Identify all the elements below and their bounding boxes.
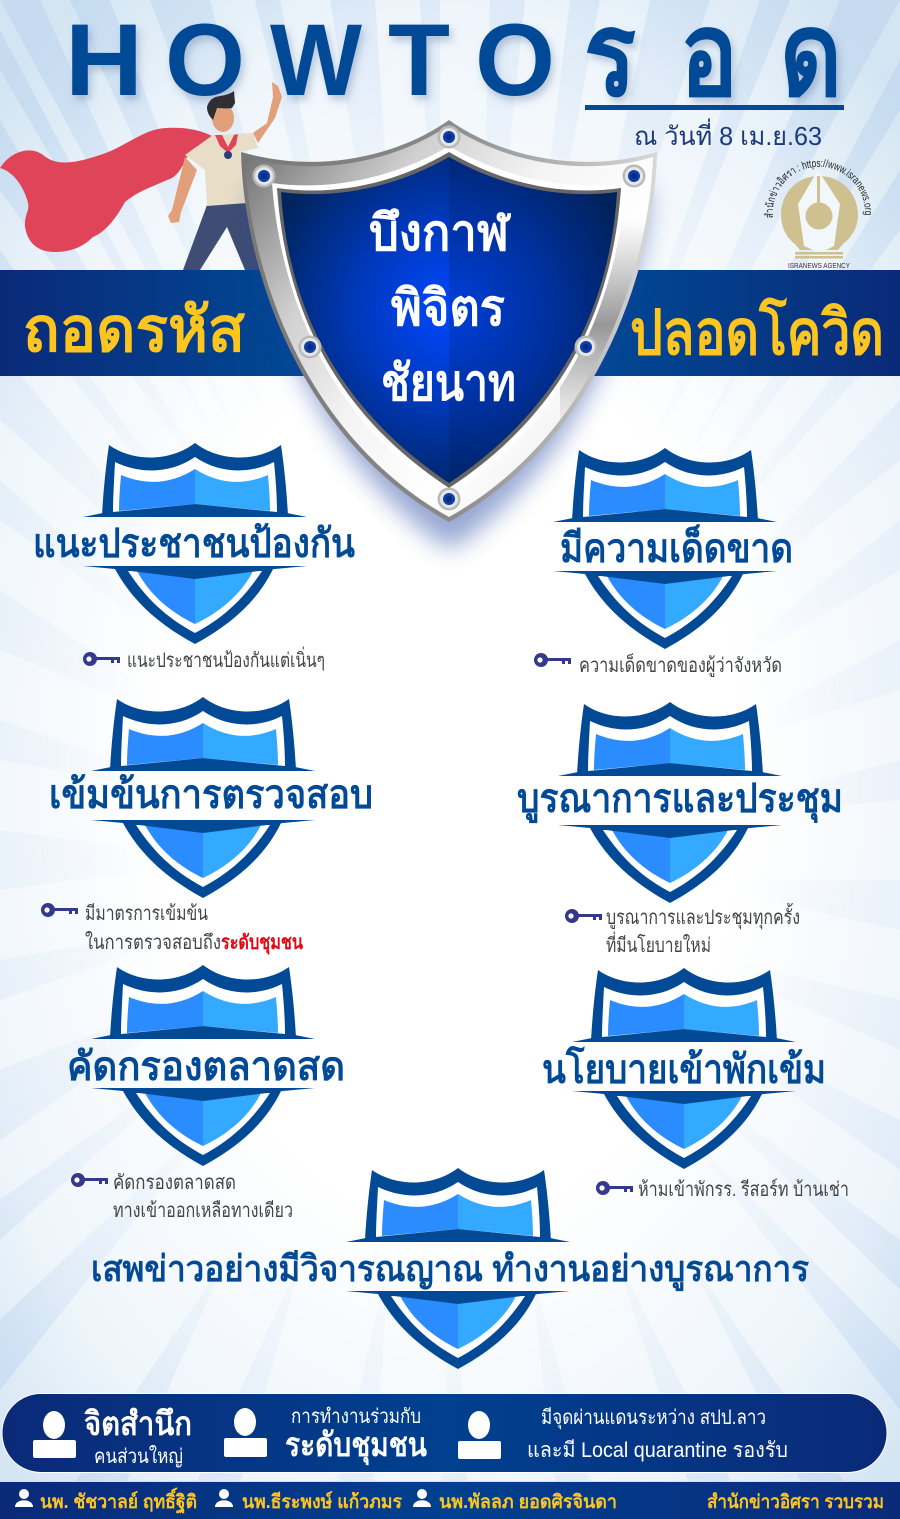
- key note 5: ทางเข้าออกเหลือทางเดียว: [113, 1200, 293, 1222]
- text: จุดผ่านแดน: และมี Local quarantine รองรับ: [527, 1439, 788, 1462]
- badge: บูรณาการและประชุม: [517, 702, 843, 903]
- banner right: [580, 270, 900, 376]
- key note 6: [596, 1178, 849, 1201]
- credit 1: [15, 1487, 197, 1515]
- hero with red cape: [0, 82, 282, 270]
- key note 6: ห้ามเข้าพักรร. รีสอร์ท บ้านเช่า: [638, 1178, 849, 1201]
- date: ณ วันที่ 8 เม.ย.63: [634, 118, 822, 151]
- badge: บูรณาการและประชุม: บูรณาการและประชุม: [517, 777, 843, 824]
- credit 3: นพ.พัลลภ ยอดศิรจินดา: [439, 1492, 617, 1513]
- badge: เข้มข้นการตรวจสอบ: เข้มข้นการตรวจสอบ: [49, 773, 373, 817]
- key note 5: คัดกรองตลาดสด: [113, 1172, 236, 1194]
- text: จิตสำนึก: [84, 1405, 192, 1468]
- title: [65, 0, 842, 121]
- key note 4: [565, 903, 800, 957]
- banner text: ถอดรหัส: ถอดรหัส: [23, 296, 245, 365]
- logo: Isranews Agency: [764, 159, 871, 270]
- bottom summary pill: [2, 1394, 887, 1472]
- title underline: [585, 105, 844, 110]
- badge: เสพข่าวอย่างมีวิจารณญาณ ทำงานอย่างบูรณาการ: [91, 1168, 810, 1369]
- badge: เสพข่าวอย่างมีวิจารณญาณ ทำงานอย่างบูรณาการ: เสพข่าวอย่างมีวิจารณญาณ ทำงานอย่างบูรณาการ: [91, 1248, 810, 1292]
- badge: เข้มข้นการตรวจสอบ: [49, 697, 373, 898]
- title: O: [475, 3, 555, 117]
- title: W: [270, 3, 363, 117]
- text: ระดับชุมชน: ระดับชุมชน: [285, 1426, 427, 1466]
- logo: Isranews Agency: ISRANEWS AGENCY: [788, 261, 850, 270]
- badge: คัดกรองตลาดสด: คัดกรองตลาดสด: [67, 1045, 345, 1089]
- title: O: [165, 3, 245, 117]
- big central shield: [241, 120, 660, 550]
- badge: แนะประชาชนป้องกัน: แนะประชาชนป้องกัน: [33, 522, 355, 566]
- shield rivets: [252, 126, 646, 510]
- key note 1: แนะประชาชนป้องกันแต่เนิ่นๆ: [127, 646, 325, 672]
- credit 4: สำนักข่าวอิศรา รวบรวม: [707, 1492, 884, 1513]
- icon: person 2: [224, 1408, 267, 1457]
- title: H: [65, 3, 143, 117]
- key note 5: [71, 1172, 293, 1222]
- shield text: [369, 205, 516, 411]
- banner left: [0, 270, 320, 376]
- shield text: พิจิตร: [391, 280, 505, 336]
- icon: person 3: [458, 1411, 501, 1459]
- text: จิตสำนึก: คนส่วนใหญ่: [94, 1445, 183, 1468]
- shield text: บึงกาฬ: [369, 205, 512, 261]
- title: T: [388, 3, 450, 117]
- logo: Isranews Agency: สำนักข่าวอิศรา : https://www.isranews.org: [764, 159, 871, 218]
- badge: นโยบายเข้าพักเข้ม: [542, 968, 826, 1169]
- shield text: ชัยนาท: [381, 355, 516, 411]
- text: ระดับชุมชน: [285, 1406, 427, 1466]
- key note 2: ความเด็ดขาดของผู้ว่าจังหวัด: [579, 652, 782, 678]
- credit 2: นพ.ธีระพงษ์ แก้วภมร: [242, 1491, 403, 1513]
- key note 4: บูรณาการและประชุมทุกครั้ง: [606, 903, 800, 930]
- key note 3: [41, 903, 303, 955]
- text: จุดผ่านแดน: มีจุดผ่านแดนระหว่าง สปป.ลาว: [541, 1407, 766, 1430]
- footer credits bar: [0, 1481, 900, 1519]
- key note 2: [534, 652, 782, 678]
- credit 1: นพ. ชัชวาลย์ ฤทธิ์ฐิติ: [40, 1487, 197, 1515]
- key note 3: ระดับชุมชน: [221, 932, 303, 955]
- text: จิตสำนึก: จิตสำนึก: [84, 1405, 192, 1442]
- badge: แนะประชาชนป้องกัน: [33, 443, 355, 644]
- badge: มีความเด็ดขาด: [553, 448, 793, 649]
- badge: มีความเด็ดขาด: มีความเด็ดขาด: [560, 523, 793, 571]
- key note 3: ในการตรวจสอบถึง: [85, 931, 221, 954]
- text: ระดับชุมชน: การทำงานร่วมกับ: [291, 1406, 421, 1428]
- icon: person 1: [33, 1411, 76, 1458]
- key note 4: ที่มีนโยบายใหม่: [606, 931, 711, 957]
- badge: นโยบายเข้าพักเข้ม: นโยบายเข้าพักเข้ม: [542, 1046, 826, 1092]
- badge: คัดกรองตลาดสด: [67, 965, 345, 1166]
- key note 1: [83, 646, 325, 672]
- text: จุดผ่านแดน: [527, 1407, 788, 1462]
- key note 3: มีมาตรการเข้มข้น: [85, 903, 208, 925]
